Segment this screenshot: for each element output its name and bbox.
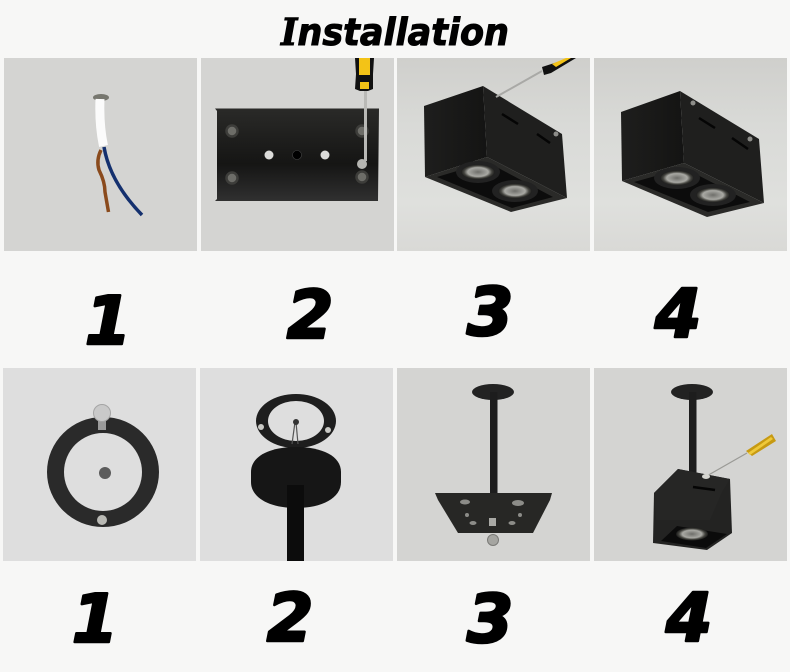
icon: screwdriver [702,434,776,479]
title: Installation [280,10,509,54]
panel: step 3, fixing twin-lamp box [397,58,590,251]
icon: screwdriver [496,58,576,97]
lamp box [621,91,764,217]
bottom screw [97,515,107,525]
plate screw holes [226,126,368,184]
ceiling disc [671,384,713,400]
nut [488,534,498,546]
icon: screwdriver [355,58,374,169]
panel: step 4, pendant lamp fixed [594,368,787,561]
blue wire [104,147,142,215]
rod [689,392,696,474]
mounting ring [47,417,159,527]
step number 4, row 2: 4 [665,579,712,657]
step number 4, row 1: 4 [654,275,701,353]
bracket plate [435,493,552,533]
panel: step 2, ceiling disc and rod [200,368,393,561]
white cable [100,99,104,146]
step number 2, row 1: 2 [287,276,333,354]
step number 1, row 1: 1 [85,282,131,360]
panel: step 1, mounting ring [3,368,196,561]
bracket holes [460,500,524,526]
step number 3, row 2: 3 [467,580,513,658]
panel: step 2, mounting plate [201,58,394,251]
top screw [94,404,110,430]
panel: step 1, stripped wires [4,58,197,251]
lamp box [424,86,567,212]
panel: step 3, pendant bracket [397,368,590,561]
wire in hole [292,422,298,444]
rod [490,392,498,494]
ceiling disc [472,384,514,400]
ring on ceiling [256,394,336,448]
step number 1, row 2: 1 [72,580,118,658]
ceiling disc [251,447,341,508]
panel: step 4, twin-lamp box fixed [594,58,787,251]
plate centre holes [264,150,330,160]
mounting plate [215,108,379,201]
ring screws [258,424,331,433]
icon: ceiling hole [93,94,109,101]
lamp box [653,469,732,550]
ceiling hole [99,467,111,479]
step number 3, row 1: 3 [467,273,513,351]
rod [287,485,304,561]
step number 2, row 2: 2 [267,579,313,657]
brown wire [98,150,108,212]
